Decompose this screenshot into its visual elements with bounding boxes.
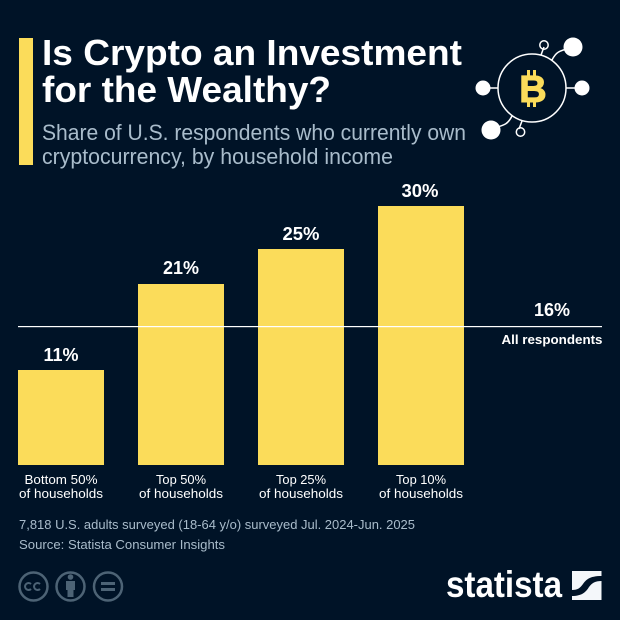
category labels: of households (259, 486, 344, 501)
footnote and source (19, 517, 415, 552)
bar chart (18, 181, 602, 501)
reference line label: All respondents (502, 332, 602, 347)
value labels (44, 181, 570, 365)
category labels: Top 10% (396, 472, 446, 487)
title: Is Crypto an Investment (42, 32, 462, 73)
category labels: of households (379, 486, 464, 501)
bar: top 10% (378, 206, 464, 465)
subtitle: cryptocurrency, by household income (42, 144, 393, 169)
footnote and source: Source: Statista Consumer Insights (19, 537, 225, 552)
title: for the Wealthy? (42, 69, 331, 110)
icon: creative commons licence (20, 572, 122, 600)
icon: bitcoin network (476, 38, 590, 140)
title accent bar (19, 38, 33, 165)
category labels: of households (139, 486, 224, 501)
subtitle: Share of U.S. respondents who currently own (42, 120, 466, 145)
value labels: 25% (282, 224, 320, 244)
value labels: 16% (534, 300, 570, 320)
footnote and source: 7,818 U.S. adults surveyed (18-64 y/o) surveyed Jul. 2024-Jun. 2025 (19, 517, 415, 532)
icon: bitcoin network: B (519, 69, 547, 111)
value labels: 30% (402, 181, 438, 201)
statista logo: statista (446, 564, 562, 605)
icon: statista mark (572, 571, 602, 600)
reference line: all respondents (18, 326, 602, 327)
bar: bottom 50% (18, 370, 104, 465)
category labels (19, 472, 464, 501)
title (42, 32, 462, 110)
value labels: 21% (163, 258, 199, 278)
category labels: of households (19, 486, 104, 501)
subtitle (42, 120, 466, 169)
category labels: Top 25% (276, 472, 326, 487)
value labels: 11% (44, 345, 78, 365)
category labels: Bottom 50% (24, 472, 98, 487)
bar: top 50% (138, 284, 224, 465)
category labels: Top 50% (156, 472, 206, 487)
bar: top 25% (258, 249, 344, 465)
